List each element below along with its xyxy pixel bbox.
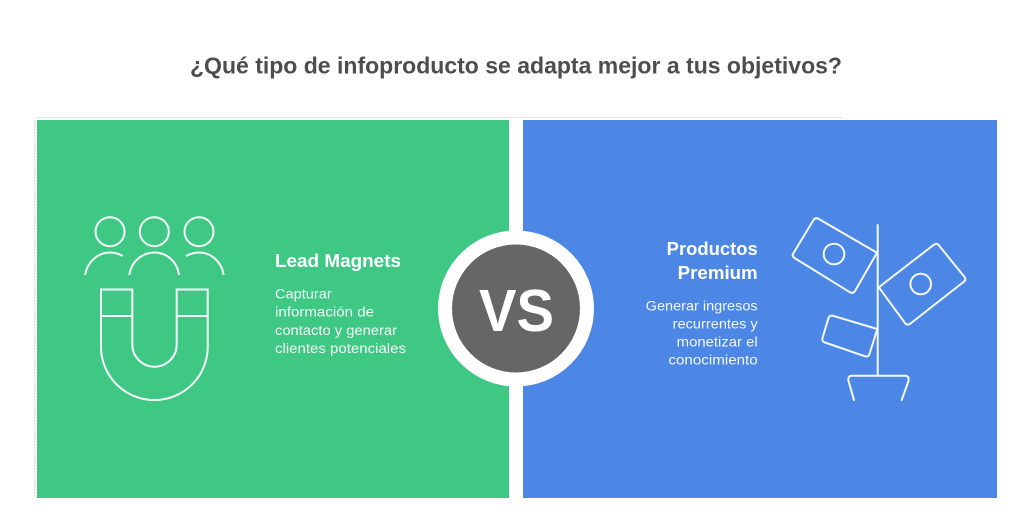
heading: Productos Premium: Premium: [678, 263, 758, 283]
heading: Lead Magnets: Lead Magnets: [275, 251, 401, 271]
heading: Productos Premium: Productos: [667, 239, 758, 259]
icon: money plant: [793, 218, 965, 400]
text: Productos Premium description: [646, 299, 758, 368]
panel: Productos Premium: [523, 120, 997, 498]
text: Productos Premium description: recurrentes y: [673, 316, 758, 332]
text: Productos Premium description: monetizar el: [677, 335, 758, 350]
text: Lead Magnets description: contacto y generar: [275, 323, 398, 338]
text: Lead Magnets description: [275, 286, 406, 356]
icon: people and magnet: [85, 217, 224, 400]
heading: Productos Premium: [667, 239, 758, 283]
text: Productos Premium description: conocimiento: [668, 352, 758, 368]
panel: Lead Magnets: [37, 120, 509, 498]
text: Lead Magnets description: Capturar: [275, 286, 332, 302]
VS badge: VS: [479, 278, 554, 344]
text: Lead Magnets description: clientes potenciales: [275, 341, 406, 356]
text: Productos Premium description: Generar ingresos: [646, 299, 758, 314]
text: Lead Magnets description: información de: [275, 305, 374, 320]
title: ¿Qué tipo de infoproducto se adapta mejor a tus objetivos?: [190, 52, 842, 78]
VS badge: [438, 230, 594, 386]
